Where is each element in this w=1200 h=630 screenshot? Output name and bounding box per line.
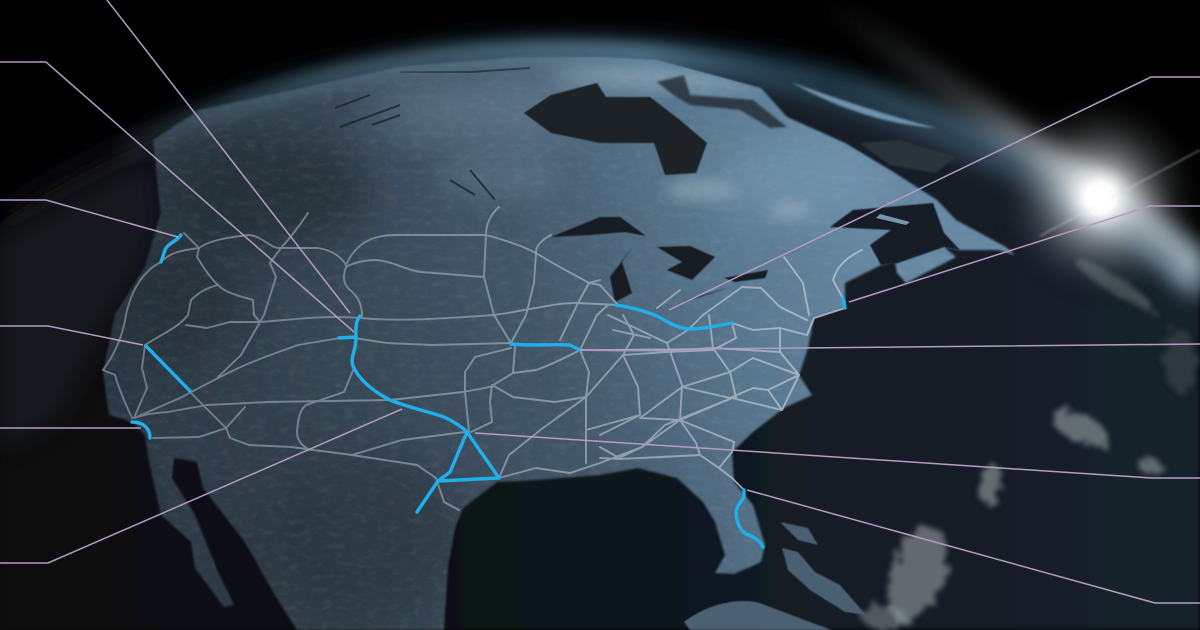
highlighted corridors: blue lines (132, 235, 845, 547)
corridor: Pacific Northwest (161, 235, 181, 262)
leader: California (0, 326, 143, 345)
Bahamas (780, 522, 866, 615)
Cuba (684, 601, 832, 630)
leader: upper right Midwest (669, 77, 1200, 310)
leader: Southern California (0, 427, 141, 429)
corridor: New England (843, 298, 845, 308)
corridor: Front Range to Texas (352, 316, 467, 432)
leader: upper left (0, 62, 354, 332)
clouds (863, 254, 1196, 630)
land shading: snow north of the bay (370, 80, 590, 140)
atmosphere glow inside the limb (0, 58, 1200, 286)
corridor: Denver spur (339, 337, 356, 338)
lake: Michigan (610, 245, 634, 302)
atmosphere glow above the limb (0, 45, 1200, 270)
land shading: dark western Canada (150, 130, 370, 250)
Arctic lakes and inlets (335, 68, 530, 200)
Anticosti island (876, 214, 910, 225)
leader: New England (849, 206, 1200, 302)
bright limb beyond the sun (1085, 180, 1200, 296)
corridor: Southern California (132, 422, 150, 438)
lake: Erie (680, 287, 730, 302)
lake: Ontario (724, 270, 768, 282)
corridor: Chicago to Detroit (616, 305, 732, 329)
corridor: Florida (736, 490, 763, 547)
corridor: Texas triangle (417, 432, 499, 512)
leader: central east-west (580, 344, 1200, 350)
corridor: Midwest (511, 344, 580, 350)
leader: Pacific Northwest (0, 200, 178, 237)
Gulf of St Lawrence (830, 203, 960, 265)
Greenland: dark land with lit crescent (791, 82, 956, 173)
Hudson Bay (524, 83, 707, 175)
leader: Gulf (475, 433, 1200, 478)
Foxe Basin and Arctic channels (657, 75, 787, 128)
corridor: California Central Valley (146, 346, 190, 391)
land: North America (102, 56, 1015, 630)
leader: top left steep (107, 0, 350, 313)
land shading: bright eastern Canada (715, 140, 885, 220)
land shading: dim Mexico (260, 454, 458, 620)
Great Lakes (551, 217, 768, 302)
haze over the northern land edge (120, 52, 820, 152)
lake: Superior (551, 217, 646, 237)
leader: Florida (747, 490, 1200, 603)
lens streak from the sun (812, 0, 1110, 215)
lake: Huron (657, 246, 715, 280)
leader: Texas lower left (0, 409, 402, 563)
rail network: grey lines (103, 207, 862, 510)
sun flare (990, 88, 1200, 308)
night side: dim streaked hemisphere (0, 160, 160, 450)
